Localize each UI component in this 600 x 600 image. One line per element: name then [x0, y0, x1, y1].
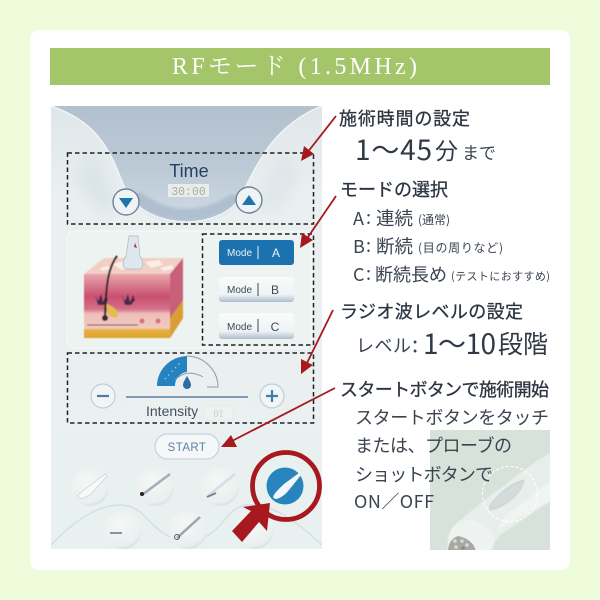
text: mode B: 断続: [376, 233, 413, 259]
heading: start: スタートボタンで施術開始: [340, 376, 549, 402]
dashed box: mode: [202, 234, 314, 345]
skin illustration panel: [67, 231, 312, 348]
start button: START: [168, 442, 206, 454]
arrow: time: [301, 116, 336, 161]
text: mode B: [353, 232, 503, 259]
heading: time setting: 施術時間の設定: [339, 105, 470, 131]
text: mode A: 連続: [376, 205, 413, 231]
text: time range: [355, 129, 496, 169]
big red arrow: [232, 503, 270, 542]
mode button C: C: [271, 320, 280, 334]
text: level range: 段階: [498, 325, 548, 361]
mode button A: Mode: [227, 248, 252, 259]
text: start description: スタートボタンをタッチ: [355, 404, 549, 430]
text: mode C: (テストにおすすめ): [451, 268, 550, 284]
text: level range: [356, 323, 548, 363]
time label and readout: Time: [169, 161, 209, 181]
dashed highlight circle: [482, 466, 538, 522]
intensity minus button: [91, 384, 115, 408]
title bar: RFモード (1.5MHz): [172, 54, 417, 80]
text: mode C: C: [353, 261, 364, 287]
mode button A: A: [272, 246, 280, 260]
mode button B: [219, 277, 294, 302]
text: time range: まで: [462, 139, 496, 164]
text: mode C: 断続長め: [375, 261, 447, 287]
text: time range: 1〜45: [355, 129, 432, 169]
intensity label and readout: Intensity: [146, 403, 198, 419]
lower curved line: [51, 505, 322, 545]
mode button B: Mode: [227, 285, 252, 296]
time up button: [236, 187, 262, 213]
text: time range: 分: [435, 132, 458, 166]
intensity label and readout: [147, 406, 233, 420]
intensity slider: [126, 396, 248, 398]
time label and readout: [168, 164, 209, 197]
dashed box: time: [68, 153, 314, 224]
mode button B: B: [271, 283, 279, 297]
text: start description: ON／OFF: [354, 488, 434, 514]
title bar: [50, 48, 550, 85]
time down button: [113, 189, 139, 215]
selected blue thumbnail: [266, 468, 304, 504]
text: start description: [354, 404, 549, 514]
mode button C: [219, 313, 294, 339]
probe photo: [430, 430, 552, 552]
text: level range: レベル: [356, 332, 411, 358]
text: start description: ショットボタンで: [355, 461, 493, 487]
time label and readout: 30:00: [171, 186, 206, 199]
red highlight ring: [252, 452, 320, 520]
text: mode B: B: [353, 233, 365, 259]
treatment probe: [123, 236, 143, 269]
arrow: start: [221, 388, 335, 447]
mode button C: Mode: [227, 322, 252, 333]
text: mode A: (通常): [418, 211, 450, 228]
skin cross-section: [84, 256, 183, 338]
dashed box: intensity: [68, 353, 314, 423]
heading: mode selection: モードの選択: [340, 176, 448, 202]
text: level range: :: [412, 327, 418, 359]
text: mode C: :: [366, 260, 371, 286]
intensity label and readout: 01: [214, 409, 224, 420]
intensity plus button: [260, 384, 284, 408]
probe thumbnails: [71, 468, 274, 549]
time dial curved backdrop: [51, 106, 322, 222]
intensity gauge: [157, 356, 218, 389]
start button: [155, 434, 219, 459]
arrow: mode: [300, 196, 336, 248]
text: mode A: [353, 204, 450, 231]
text: level range: 1〜10: [423, 323, 496, 363]
heading: RF level: ラジオ波レベルの設定: [340, 298, 523, 324]
text: mode A: :: [366, 204, 371, 230]
text: mode B: (目の周りなど): [418, 239, 503, 256]
text: mode C: [353, 260, 550, 287]
text: mode B: :: [366, 232, 371, 258]
text: mode A: A: [353, 205, 364, 231]
text: start description: または、プローブの: [355, 432, 512, 458]
mode button A: [219, 240, 294, 265]
arrow: intensity: [301, 310, 333, 374]
control panel screen: [51, 106, 322, 549]
